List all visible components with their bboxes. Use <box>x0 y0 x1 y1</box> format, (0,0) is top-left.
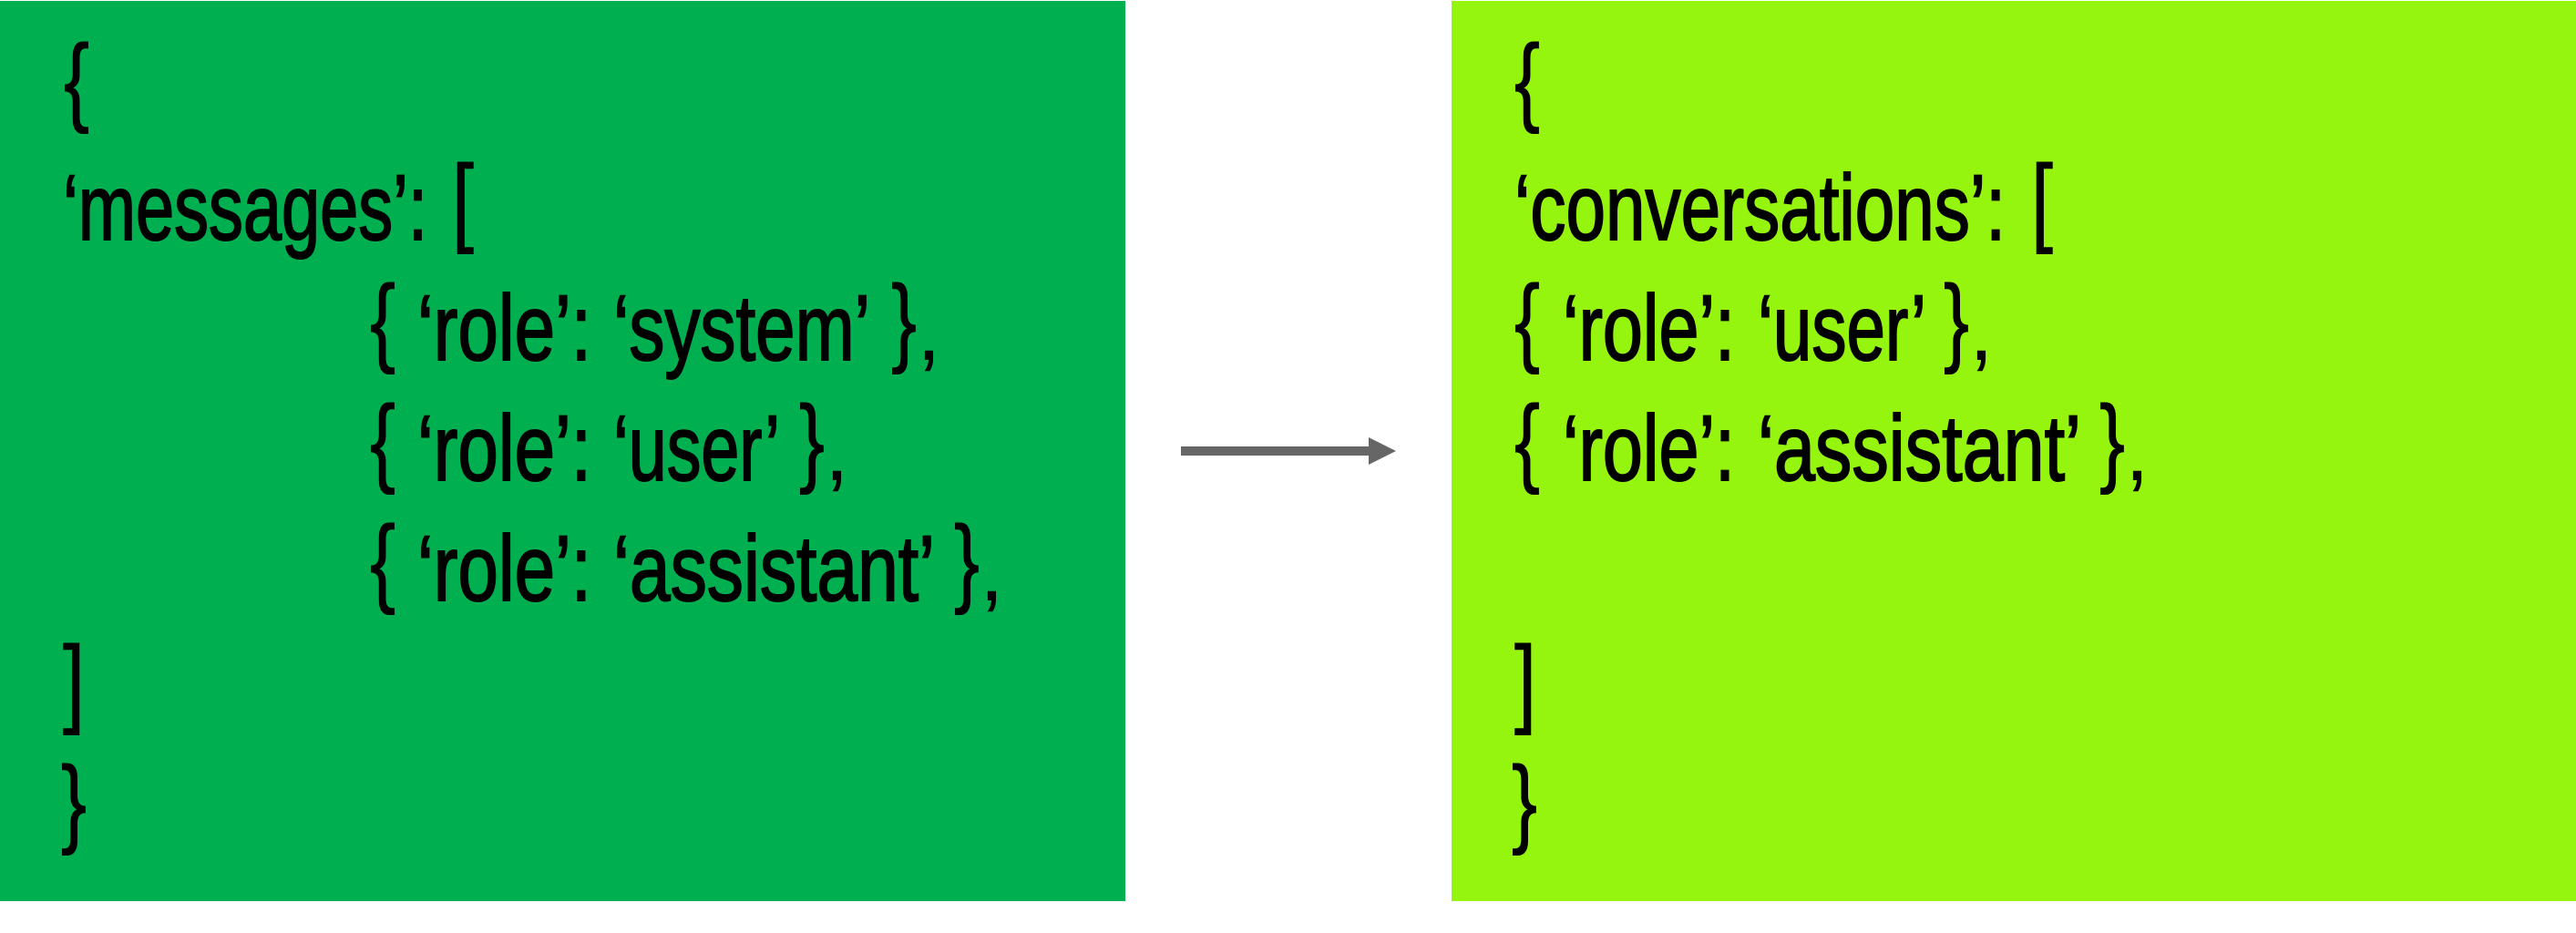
text: user role: } <box>799 384 825 495</box>
text: opening brace: { <box>64 24 89 134</box>
text: user role: ‘user’ <box>613 396 780 500</box>
text: assistant role: ‘assistant’ <box>1758 396 2081 500</box>
text: assistant role: } <box>954 505 980 615</box>
text: user role: { <box>1514 264 1540 374</box>
text: system role: ‘role’: <box>417 276 591 380</box>
text: assistant role: , <box>980 522 1004 620</box>
text: system role: , <box>917 282 941 379</box>
text: messages key: [ <box>452 144 474 254</box>
text: closing brace: } <box>61 745 87 856</box>
text: conversations key: ‘conversations’: <box>1514 156 2006 260</box>
text: user role: ‘role’: <box>1563 276 1735 380</box>
text: user role <box>1514 264 1994 380</box>
text: user role: , <box>1969 282 1994 379</box>
text: system role: { <box>370 264 395 374</box>
text: assistant role: { <box>1514 384 1540 495</box>
text: user role: { <box>370 384 395 495</box>
text: assistant role: { <box>370 505 395 615</box>
text: opening brace: { <box>1514 24 1540 134</box>
panel: messages format <box>0 1 1125 901</box>
text: assistant role: ‘role’: <box>417 517 591 620</box>
text: user role <box>370 384 849 500</box>
panel: conversations format <box>1452 1 2576 901</box>
text: assistant role: } <box>2099 384 2125 495</box>
text: user role: , <box>825 402 849 499</box>
text: assistant role: ‘role’: <box>1563 396 1735 500</box>
text: conversations key: [ <box>2031 144 2053 254</box>
text: assistant role <box>1514 384 2150 500</box>
text: assistant role: ‘assistant’ <box>613 517 935 620</box>
text: messages key: ‘messages’: <box>63 156 427 260</box>
text: closing bracket: ] <box>63 625 85 735</box>
text: system role: } <box>891 264 917 374</box>
text: user role: ‘role’: <box>417 396 591 500</box>
text: assistant role <box>370 505 1004 620</box>
text: user role: } <box>1944 264 1969 374</box>
text: closing brace: } <box>1512 745 1537 856</box>
text: system role: ‘system’ <box>613 276 870 380</box>
text: closing bracket: ] <box>1514 625 1536 735</box>
arrow: converts to <box>1181 437 1396 465</box>
text: assistant role: , <box>2125 402 2150 499</box>
text: user role: ‘user’ <box>1758 276 1926 380</box>
text: system role <box>370 264 941 380</box>
